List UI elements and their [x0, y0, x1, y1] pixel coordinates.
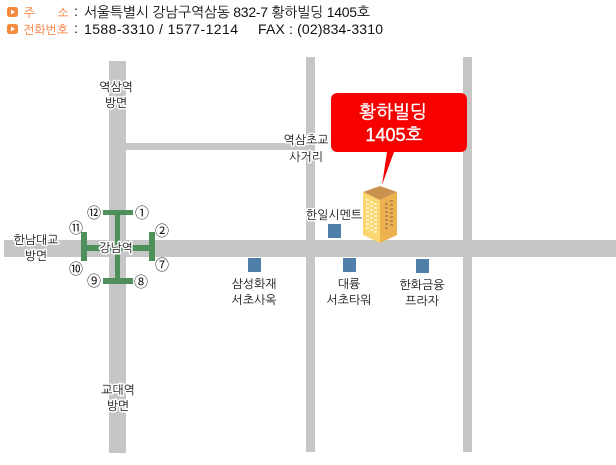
- subway exits: Gangnam station: [81, 210, 155, 284]
- label: Samsung Fire Seocho office: 서초사옥: [231, 293, 277, 307]
- label: Hanwha Finance Plaza: 프라자: [405, 294, 439, 308]
- label: Yeoksam elementary school intersection: 사거리: [289, 150, 323, 164]
- label: Daeryung Seocho tower: 서초타워: [326, 293, 372, 307]
- exit numbers: [69, 203, 169, 292]
- callout: Hwangha Building room 1405: 황하빌딩: [359, 102, 427, 122]
- exit numbers: ⑨: [87, 271, 101, 291]
- marker: Hanwha Finance: [416, 259, 429, 273]
- icon: address bullet: [7, 7, 18, 17]
- fax text: FAX : (02)834-3310: [258, 21, 383, 37]
- label: Seoul Nat'l Univ of Education direction: 방면: [107, 399, 129, 413]
- address colon: :: [74, 3, 78, 19]
- label: Hannam bridge direction: 한남대교: [13, 233, 59, 247]
- label: Hanil Cement: 한일시멘트: [306, 208, 362, 222]
- label: Hannam bridge direction: 방면: [25, 249, 47, 263]
- phone label: 전화번호: [23, 23, 68, 37]
- address header: [7, 3, 383, 37]
- label: Seoul Nat'l Univ of Education direction: 교대역: [101, 383, 135, 397]
- exit numbers: ⑦: [155, 255, 169, 275]
- icon: phone bullet: [7, 24, 18, 34]
- phone text: 1588-3310 / 1577-1214: [84, 21, 238, 37]
- exit numbers: ⑩: [69, 259, 83, 279]
- address text: 서울특별시 강남구역삼동 832-7 황하빌딩 1405호: [84, 4, 370, 20]
- exit numbers: ②: [155, 221, 169, 241]
- exit numbers: ①: [135, 203, 149, 223]
- exit numbers: ⑪: [69, 218, 83, 238]
- exit numbers: ⑧: [134, 272, 148, 292]
- callout: Hwangha Building room 1405: 1405호: [366, 125, 423, 145]
- icon: building: [363, 186, 397, 243]
- address label second character: 소: [58, 6, 69, 20]
- label: Yeoksam elementary school intersection: 역삼초교: [283, 133, 329, 147]
- exit numbers: ⑫: [87, 203, 101, 223]
- label: Hanwha Finance Plaza: 한화금융: [399, 278, 445, 292]
- callout: Hwangha Building room 1405: [331, 93, 467, 185]
- phone colon: :: [74, 20, 78, 36]
- address label: 주: [24, 6, 35, 20]
- marker: Daeryung: [343, 258, 356, 272]
- label: Daeryung Seocho tower: 대륭: [338, 277, 360, 291]
- marker: Hanil Cement: [328, 224, 341, 238]
- label: Yeoksam station direction: 역삼역: [99, 80, 133, 94]
- label: Gangnam station: 강남역: [99, 241, 133, 255]
- marker: Samsung Fire: [248, 258, 261, 272]
- label: Samsung Fire Seocho office: 삼성화재: [231, 277, 277, 291]
- label: Yeoksam station direction: 방면: [105, 96, 127, 110]
